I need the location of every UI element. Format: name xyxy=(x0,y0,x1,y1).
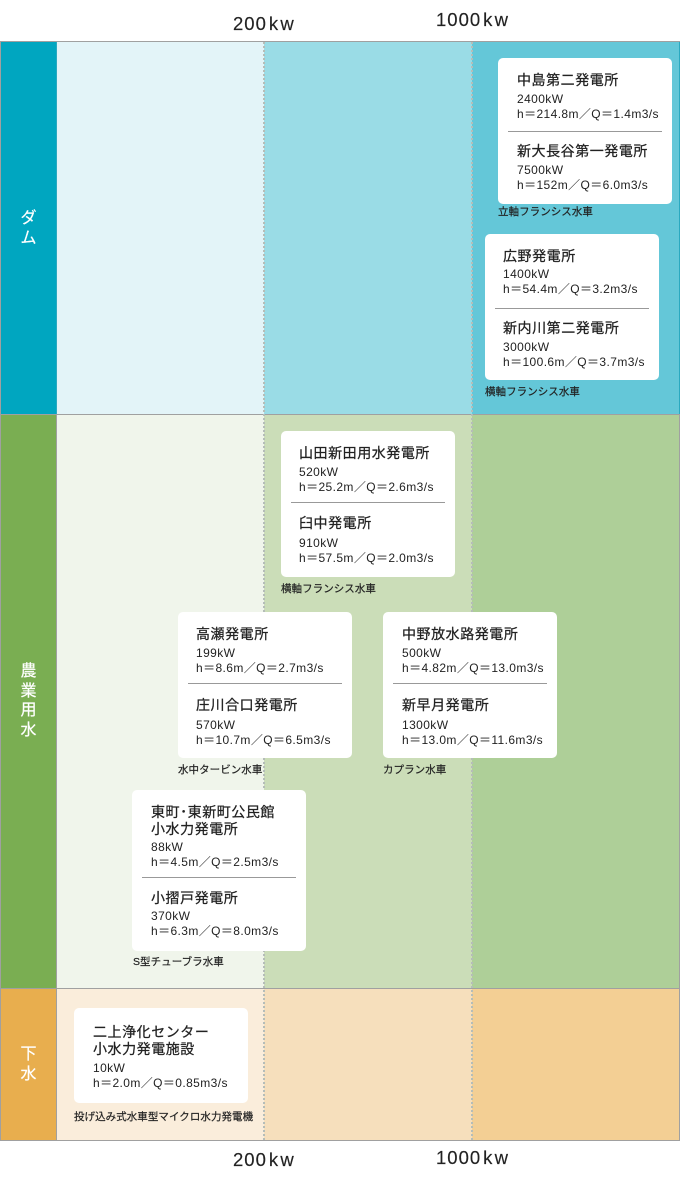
caption: S tubular: S型チューブラ水車 xyxy=(133,956,224,968)
row label: agricultural water: 水 xyxy=(20,722,36,739)
card: vertical francis 1: 7500kW xyxy=(517,163,563,177)
row label: agricultural water xyxy=(20,662,36,739)
card: vertical francis 1: 2400kW xyxy=(517,92,563,106)
card: horizontal francis dam: h＝100.6m／Q＝3.7m3/s xyxy=(503,355,645,369)
row label: agricultural water: 業 xyxy=(20,683,36,700)
row label: sewage: 下 xyxy=(20,1046,36,1063)
card: vertical francis 1: h＝152m／Q＝6.0m3/s xyxy=(517,178,648,192)
card: horizontal francis dam: h＝54.4m／Q＝3.2m3/s xyxy=(503,282,638,296)
card: horizontal francis dam: 新内川第二発電所 xyxy=(503,320,619,336)
card: kaplan: 中野放水路発電所 xyxy=(402,626,518,642)
card: S tubular: h＝4.5m／Q＝2.5m3/s xyxy=(151,855,279,869)
card: horizontal francis agriculture: h＝25.2m／Q＝2.6m3/s xyxy=(299,480,434,494)
card: horizontal francis agriculture: 山田新田用水発電所 xyxy=(299,445,430,461)
caption: submersible turbine: 水中タービン水車 xyxy=(178,764,262,776)
card: vertical francis 1 xyxy=(498,58,672,204)
card: vertical francis 1: h＝214.8m／Q＝1.4m3/s xyxy=(517,107,659,121)
card: sewage plant xyxy=(74,1008,248,1103)
card: submersible turbine: 高瀬発電所 xyxy=(196,626,269,642)
row: agricultural water xyxy=(1,415,679,988)
card: S tubular: 東町･東新町公民館 xyxy=(151,804,275,820)
card: horizontal francis agriculture: 520kW xyxy=(299,465,338,479)
card: kaplan: 1300kW xyxy=(402,718,448,732)
card: submersible turbine: h＝8.6m／Q＝2.7m3/s xyxy=(196,661,324,675)
axis label bottom 200kw: 200kw xyxy=(233,1149,296,1170)
row label: dam: ダ xyxy=(20,210,36,227)
axis label bottom 1000kw: 1000kw xyxy=(436,1147,510,1168)
card: horizontal francis dam xyxy=(485,234,659,380)
caption: kaplan: カプラン水車 xyxy=(383,764,446,776)
card: horizontal francis agriculture xyxy=(281,431,455,577)
card: submersible turbine: h＝10.7m／Q＝6.5m3/s xyxy=(196,733,331,747)
card: kaplan: h＝4.82m／Q＝13.0m3/s xyxy=(402,661,544,675)
card: horizontal francis agriculture: 910kW xyxy=(299,536,338,550)
row label: agricultural water: 用 xyxy=(20,702,36,719)
caption: vertical francis: 立軸フランシス水車 xyxy=(498,206,593,218)
row label: sewage: 水 xyxy=(20,1066,36,1083)
card: S tubular: 370kW xyxy=(151,909,190,923)
card: kaplan: h＝13.0m／Q＝11.6m3/s xyxy=(402,733,543,747)
card: S tubular: 小水力発電所 xyxy=(151,821,238,837)
card: submersible turbine: 庄川合口発電所 xyxy=(196,697,298,713)
card: sewage plant: 10kW xyxy=(93,1061,125,1075)
caption: horizontal francis dam: 横軸フランシス水車 xyxy=(485,386,580,398)
card: sewage plant: 小水力発電施設 xyxy=(93,1041,195,1057)
card: sewage plant: 二上浄化センター xyxy=(93,1024,209,1040)
caption: horizontal francis agriculture: 横軸フランシス水車 xyxy=(281,583,376,595)
row label: agricultural water: 農 xyxy=(20,663,36,680)
card: submersible turbine: 199kW xyxy=(196,646,235,660)
row label: dam xyxy=(20,209,36,247)
axis label top 200kw: 200kw xyxy=(233,13,296,34)
card: horizontal francis dam: 3000kW xyxy=(503,340,549,354)
axis label top 1000kw: 1000kw xyxy=(436,9,510,30)
card: S tubular xyxy=(132,790,306,951)
card: submersible turbine: 570kW xyxy=(196,718,235,732)
caption: micro hydro: 投げ込み式水車型マイクロ水力発電機 xyxy=(74,1111,253,1123)
card: horizontal francis agriculture: 臼中発電所 xyxy=(299,515,372,531)
row: dam xyxy=(1,42,680,414)
card: kaplan: 新早月発電所 xyxy=(402,697,489,713)
card: horizontal francis dam: 広野発電所 xyxy=(503,248,576,264)
card: kaplan: 500kW xyxy=(402,646,441,660)
card: S tubular: 小摺戸発電所 xyxy=(151,890,238,906)
card: submersible turbine xyxy=(178,612,352,758)
card: S tubular: h＝6.3m／Q＝8.0m3/s xyxy=(151,924,279,938)
row: sewage xyxy=(1,989,679,1140)
row label: sewage xyxy=(20,1046,36,1083)
card: horizontal francis dam: 1400kW xyxy=(503,267,549,281)
card: vertical francis 1: 中島第二発電所 xyxy=(517,72,619,88)
row label: dam: ム xyxy=(20,230,36,247)
card: S tubular: 88kW xyxy=(151,840,183,854)
card: kaplan xyxy=(383,612,557,758)
card: vertical francis 1: 新大長谷第一発電所 xyxy=(517,143,648,159)
card: horizontal francis agriculture: h＝57.5m／Q＝2.0m3/s xyxy=(299,551,434,565)
card: sewage plant: h＝2.0m／Q＝0.85m3/s xyxy=(93,1076,228,1090)
